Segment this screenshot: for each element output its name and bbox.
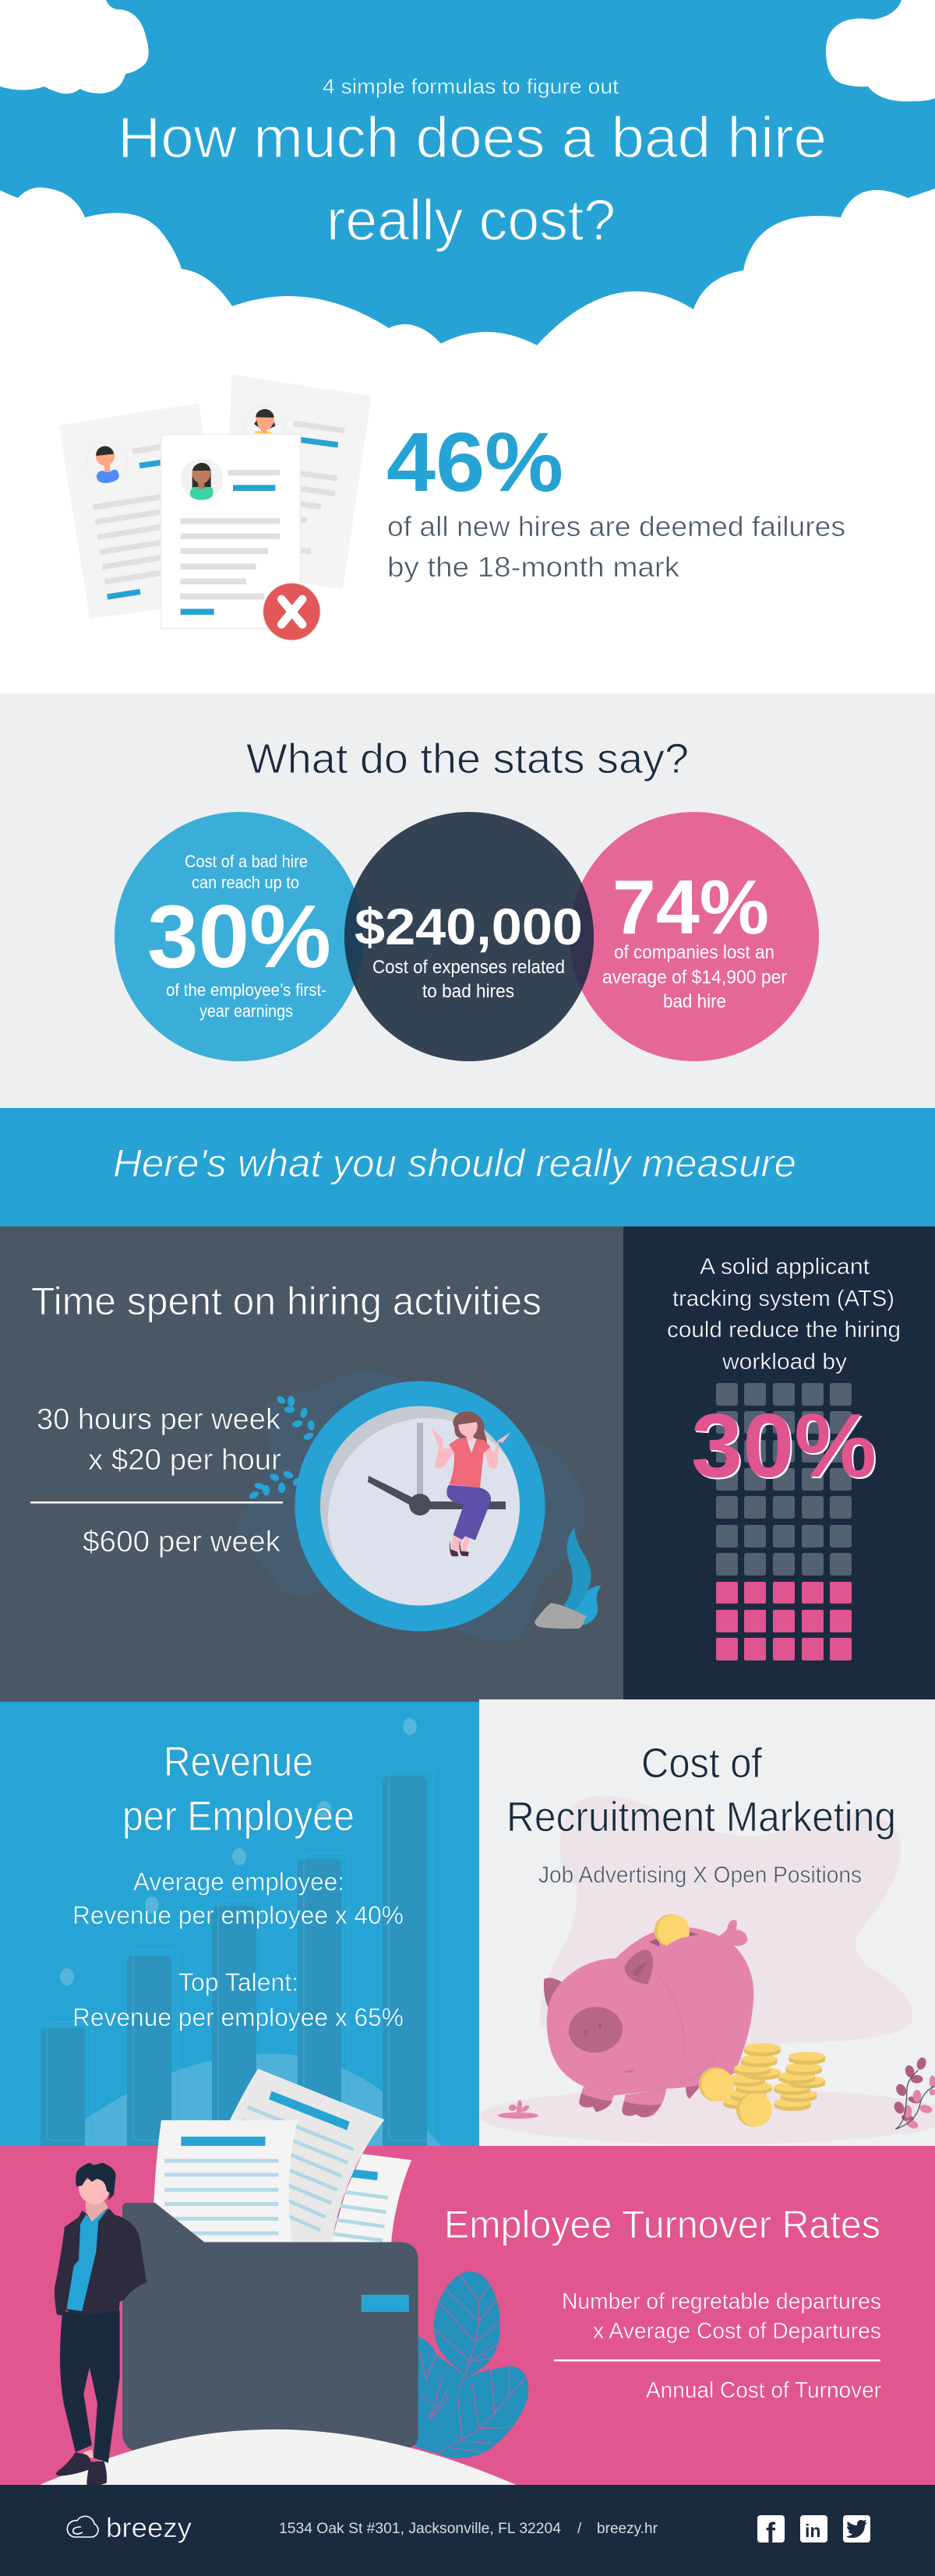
header sky	[0, 0, 935, 358]
text block: A solid applicant	[700, 1254, 870, 1279]
illustration: pink plant	[892, 2056, 935, 2130]
text: 74 percent	[602, 864, 787, 1012]
formulas: Revenue per employee x 40%	[72, 1901, 404, 1929]
illustration: clock	[237, 1371, 602, 1641]
formula: 30 hours per week	[37, 1403, 281, 1436]
front resume	[161, 434, 300, 629]
illustration: coin stacks	[699, 2044, 825, 2126]
text: 240,000 dollars	[355, 898, 583, 1002]
illustration: piggy bank	[544, 1914, 753, 2117]
icon: twitter	[843, 2515, 870, 2542]
front paper	[153, 2120, 298, 2242]
text: 30 percent: of the employee’s first-	[166, 980, 326, 1000]
circle: pink	[570, 812, 819, 1061]
stat: 30 percent: 30%	[693, 1396, 878, 1498]
plant and rock	[535, 1527, 602, 1629]
illustration: sitting woman	[431, 1411, 510, 1556]
illustration: papers in printer	[40, 2069, 517, 2485]
icon: linkedin: in	[805, 2521, 820, 2541]
title: How much does a bad hire	[118, 105, 827, 170]
formula	[554, 2289, 881, 2403]
formula: Number of regretable departures	[562, 2289, 881, 2314]
header section	[0, 0, 935, 390]
text block: workload by	[722, 1350, 848, 1374]
heading: Revenue	[164, 1738, 313, 1785]
logo	[67, 2513, 192, 2543]
formula: Job Advertising X Open Positions	[538, 1862, 862, 1888]
subtitle: 4 simple formulas to figure out	[323, 75, 619, 98]
hill	[40, 2430, 517, 2485]
background hump	[47, 2054, 441, 2146]
pictogram grid	[716, 1383, 852, 1660]
formula: x $20 per hour	[88, 1444, 281, 1477]
text: 74 percent: 74%	[612, 864, 769, 950]
cloud: bottom	[0, 188, 935, 390]
panel: revenue per employee	[0, 1702, 479, 2146]
text: 74 percent: bad hire	[663, 991, 726, 1012]
formula: $600 per week	[83, 1526, 281, 1558]
formula	[30, 1403, 283, 1558]
panel: stats	[0, 693, 935, 1108]
title: really cost?	[326, 188, 616, 252]
right resume	[224, 375, 372, 589]
text: 240,000 dollars: to bad hires	[422, 981, 514, 1002]
address: 1534 Oak St #301, Jacksonville, FL 32204	[279, 2521, 561, 2537]
text: 74 percent: of companies lost an	[614, 942, 774, 963]
text: 30 percent: 30%	[147, 887, 331, 986]
banner: what to measure	[0, 1108, 935, 1226]
text block: could reduce the hiring	[667, 1318, 901, 1343]
icon: facebook	[757, 2515, 785, 2549]
stat: 46 percent: by the 18-month mark	[387, 551, 680, 583]
overlap tones	[344, 812, 594, 1061]
formula: x Average Cost of Departures	[593, 2319, 881, 2344]
address: /	[577, 2521, 582, 2537]
text: 30 percent: year earnings	[199, 1001, 293, 1021]
formulas: Top Talent:	[178, 1968, 298, 1996]
text: 30 percent: can reach up to	[192, 873, 299, 892]
panel: ATS	[623, 1226, 935, 1699]
text block	[667, 1254, 901, 1374]
cloud: top left	[0, 0, 149, 94]
cloud: top right	[826, 0, 935, 101]
stat: 46 percent: 46%	[386, 415, 563, 509]
text: 240,000 dollars: Cost of expenses related	[372, 957, 565, 978]
illustration: leaves	[415, 2271, 528, 2458]
formula: Annual Cost of Turnover	[646, 2378, 881, 2403]
heading	[506, 1740, 896, 1840]
clock backdrop blob	[237, 1371, 584, 1641]
heading: What do the stats say?	[246, 736, 689, 782]
text block: tracking system (ATS)	[672, 1286, 894, 1311]
footer	[0, 2485, 935, 2576]
icon: resumes with red cross	[59, 375, 372, 641]
heading: Time spent on hiring activities	[31, 1279, 542, 1323]
middle paper	[228, 2069, 385, 2242]
ground	[479, 2088, 935, 2144]
title	[118, 105, 827, 252]
stat: 46 percent	[386, 415, 845, 583]
background blob	[540, 1795, 912, 2057]
back paper	[331, 2154, 411, 2242]
stat: 46 percent: of all new hires are deemed failures	[387, 510, 845, 542]
circle: blue	[115, 812, 364, 1061]
sprigs	[248, 1395, 316, 1500]
address: breezy.hr	[597, 2521, 658, 2537]
bar chart backdrop	[41, 1718, 433, 2146]
icon: red cross badge	[262, 582, 321, 641]
banner: what to measure: Here's what you should really measure	[113, 1142, 796, 1185]
stat: 30 percent: 30%	[691, 1395, 877, 1496]
formulas: Revenue per employee x 65%	[72, 2003, 404, 2031]
left resume	[59, 403, 228, 619]
heading: Cost of	[641, 1740, 763, 1787]
heading: Recruitment Marketing	[506, 1794, 896, 1840]
circle: dark	[344, 812, 594, 1061]
text: 74 percent: average of $14,900 per	[602, 967, 787, 988]
text: 240,000 dollars: $240,000	[355, 898, 583, 955]
text: 30 percent	[147, 852, 331, 1021]
illustration: small flower	[498, 2100, 538, 2119]
text: 30 percent: Cost of a bad hire	[185, 852, 308, 871]
panel: recruitment marketing	[479, 1699, 935, 2146]
illustration: standing man	[55, 2163, 146, 2486]
panel: time spent	[0, 1226, 623, 1702]
clock ring	[295, 1381, 545, 1632]
icon: linkedin	[800, 2515, 827, 2542]
clock hands	[368, 1423, 506, 1516]
heading: Employee Turnover Rates	[444, 2203, 880, 2246]
formulas: Average employee:	[133, 1868, 344, 1896]
panel: employee turnover	[0, 2069, 935, 2486]
heading: per Employee	[122, 1793, 355, 1840]
formulas	[72, 1868, 404, 2031]
heading	[122, 1738, 355, 1840]
clock face	[320, 1406, 527, 1618]
printer label	[362, 2295, 409, 2312]
icon: facebook: f	[766, 2517, 776, 2549]
logo: breezy	[106, 2513, 192, 2543]
printer body	[122, 2203, 418, 2452]
